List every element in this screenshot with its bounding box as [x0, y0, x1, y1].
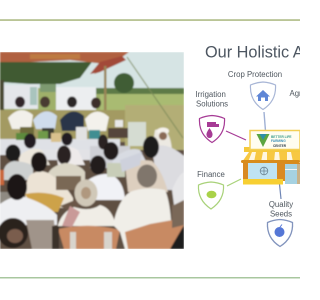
grey-haired man — [58, 205, 116, 226]
audience back — [0, 155, 184, 249]
rear row — [24, 134, 36, 148]
label: quality seeds: Seeds — [270, 210, 292, 218]
storefront — [243, 163, 300, 181]
connector lines — [226, 112, 281, 199]
window emblem — [260, 167, 268, 175]
sign text: BETTER LIFE — [271, 135, 292, 139]
ochre chair — [25, 193, 64, 212]
table and products — [0, 139, 120, 155]
beige man — [25, 171, 73, 208]
front left head — [0, 218, 28, 248]
photo: farmers meeting — [0, 52, 184, 249]
label: finance: Finance — [197, 170, 225, 179]
label: crop protection: Crop Protection — [228, 70, 282, 79]
awning — [241, 152, 300, 163]
sign board: FARMING — [271, 139, 286, 143]
shop illustration — [241, 130, 300, 184]
icon: crop protection shield — [250, 82, 276, 110]
middle row — [6, 144, 20, 162]
bottom rule — [0, 277, 300, 278]
sign board: CENTER — [273, 144, 287, 148]
presenters — [0, 110, 125, 142]
front right man — [113, 188, 172, 249]
front left man — [0, 196, 57, 225]
icon: irrigation shield — [199, 116, 225, 142]
orange chair — [58, 226, 120, 249]
label: irrigation solutions: Solutions — [196, 100, 228, 108]
icon: finance shield — [198, 182, 224, 209]
grey chair — [26, 220, 56, 249]
icon: quality seeds shield — [267, 220, 293, 246]
label: irrigation solutions: Irrigation — [196, 90, 226, 99]
sign board — [244, 130, 300, 152]
label: quality seeds: Quality — [269, 200, 293, 209]
right orange chair and dark seat — [125, 224, 150, 249]
top rule — [0, 19, 300, 21]
